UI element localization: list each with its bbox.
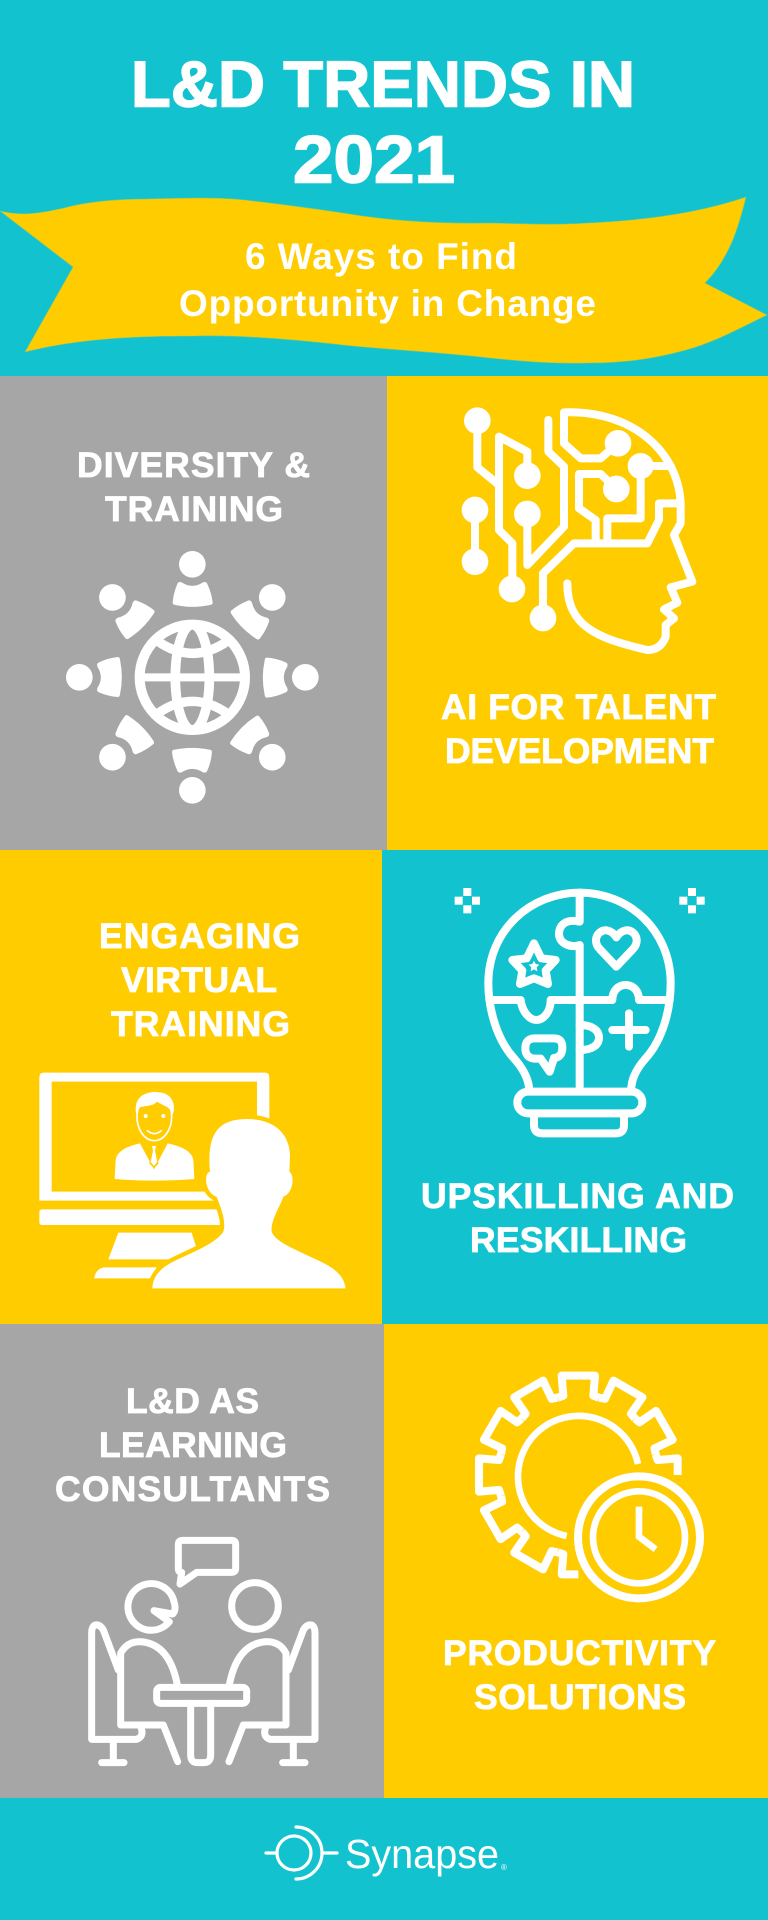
title: 2021 [293,122,455,198]
wordmark: ® [501,1863,507,1872]
heading: diversity and training [77,445,310,529]
icon: people around a globe [66,551,319,804]
icon: circuit head [462,407,692,650]
heading: diversity and training: DIVERSITY & [77,445,310,485]
header panel [0,0,768,376]
heading: productivity solutions [443,1633,716,1717]
panel: ai for talent development [387,376,768,850]
heading: ai for talent development: DEVELOPMENT [445,731,714,771]
yellow ribbon banner [0,197,767,363]
heading: engaging virtual training [99,916,300,1044]
heading: engaging virtual training: ENGAGING [99,916,300,956]
icon: video call on monitor [39,1073,346,1288]
heading: upskilling and reskilling: UPSKILLING AND [421,1176,734,1216]
subtitle [179,236,596,324]
heading: ai for talent development: AI FOR TALENT [441,687,716,727]
icon: puzzle light bulb [455,888,705,1133]
monitor [39,1073,269,1278]
subtitle: Opportunity in Change [179,283,596,324]
panel: diversity and training [0,376,387,850]
icon: gear and clock [479,1376,700,1598]
panel: upskilling and reskilling [382,850,768,1324]
presenter on screen [115,1092,194,1181]
heading: l&d as learning consultants: L&D AS [126,1381,259,1421]
icon: two people talking at a table [92,1540,315,1763]
title [131,48,635,198]
heading: diversity and training: TRAINING [105,489,283,529]
heading: productivity solutions: PRODUCTIVITY [443,1633,716,1673]
footer: synapse logo [266,1827,507,1879]
heading: engaging virtual training: TRAINING [111,1004,290,1044]
title: L&D TRENDS IN [131,48,635,120]
sparkles [455,888,705,913]
heading: productivity solutions: SOLUTIONS [474,1677,686,1717]
icon: synapse mark [266,1827,337,1879]
panel: l&d as learning consultants [0,1324,384,1798]
panel: engaging virtual training [0,850,382,1324]
heading: ai for talent development [441,687,716,771]
wordmark: Synapse [345,1831,499,1877]
viewer silhouette [152,1119,346,1288]
heading: upskilling and reskilling [421,1176,734,1260]
heading: engaging virtual training: VIRTUAL [121,960,277,1000]
heading: l&d as learning consultants: CONSULTANTS [55,1469,330,1509]
heading: upskilling and reskilling: RESKILLING [470,1220,687,1260]
panel: productivity solutions [384,1324,768,1798]
subtitle: 6 Ways to Find [245,236,517,277]
heading: l&d as learning consultants: LEARNING [99,1425,287,1465]
heading: l&d as learning consultants [55,1381,330,1509]
